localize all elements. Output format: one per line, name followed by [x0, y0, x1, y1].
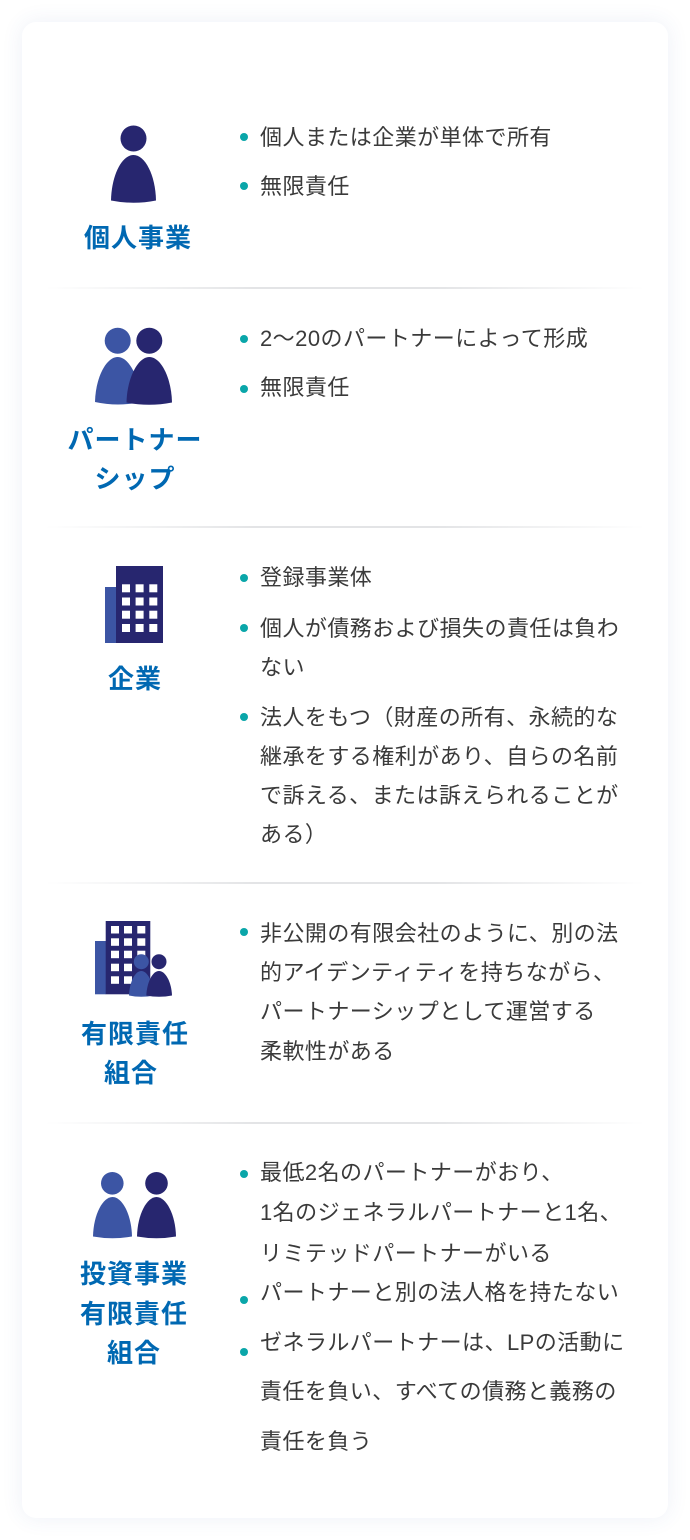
bullet text continuation: 責任を負い、すべての債務と義務の	[260, 1379, 617, 1404]
bullet text: 無限責任	[260, 375, 350, 400]
bullet marker	[240, 133, 248, 141]
icon: building with people	[95, 921, 172, 997]
heading: 組合	[107, 1338, 161, 1368]
bullet marker	[240, 335, 248, 343]
bullet text continuation: 責任を負う	[260, 1429, 372, 1454]
heading: 企業	[108, 664, 162, 694]
bullet text continuation: パートナーシップとして運営する	[260, 999, 596, 1024]
bullet text: 非公開の有限会社のように、別の法	[260, 921, 619, 946]
heading: シップ	[94, 464, 176, 494]
bullet text continuation: ある）	[260, 822, 327, 847]
bullet text: 2〜20のパートナーによって形成	[260, 326, 588, 351]
bullet text: 無限責任	[260, 174, 350, 199]
bullet marker	[240, 624, 248, 632]
icon: single person	[111, 126, 156, 203]
bullet text continuation: 柔軟性がある	[260, 1039, 395, 1064]
heading: 有限責任	[80, 1299, 188, 1329]
bullet text continuation: 的アイデンティティを持ちながら、	[260, 960, 615, 985]
bullet text: 最低2名のパートナーがおり、	[260, 1160, 564, 1185]
heading: パートナー	[67, 425, 202, 455]
bullet text continuation: ない	[260, 655, 305, 680]
panel: individual business	[84, 125, 552, 253]
panel: partnership	[67, 326, 588, 494]
panel: limited liability partnership	[81, 921, 619, 1088]
bullet marker	[240, 1348, 248, 1356]
icon: building	[105, 566, 163, 643]
bullet text: 法人をもつ（財産の所有、永続的な	[260, 705, 618, 730]
bullet marker	[240, 713, 248, 721]
bullet text: ゼネラルパートナーは、LPの活動に	[260, 1330, 625, 1355]
bullet text: 個人または企業が単体で所有	[260, 125, 552, 150]
bullet marker	[240, 1170, 248, 1178]
bullet text continuation: で訴える、または訴えられることが	[260, 783, 619, 808]
heading: 個人事業	[84, 223, 192, 253]
heading: 投資事業	[80, 1259, 188, 1289]
icon: two separate people	[93, 1172, 176, 1238]
heading: 組合	[104, 1058, 158, 1088]
bullet marker	[240, 928, 248, 936]
bullet text: 個人が債務および損失の責任は負わ	[260, 616, 619, 641]
bullet text continuation: 継承をする権利があり、自らの名前	[260, 744, 618, 769]
panel: corporation	[105, 565, 619, 847]
heading: 有限責任	[81, 1019, 189, 1049]
bullet marker	[240, 385, 248, 393]
bullet marker	[240, 182, 248, 190]
bullet text continuation: リミテッドパートナーがいる	[260, 1241, 552, 1266]
bullet marker	[240, 574, 248, 582]
icon: two overlapping people	[95, 328, 172, 405]
bullet text continuation: 1名のジェネラルパートナーと1名、	[260, 1200, 622, 1225]
bullet marker	[240, 1296, 248, 1304]
bullet text: 登録事業体	[260, 565, 372, 590]
panel: investment limited partnership	[80, 1160, 625, 1454]
bullet text: パートナーと別の法人格を持たない	[260, 1280, 619, 1305]
